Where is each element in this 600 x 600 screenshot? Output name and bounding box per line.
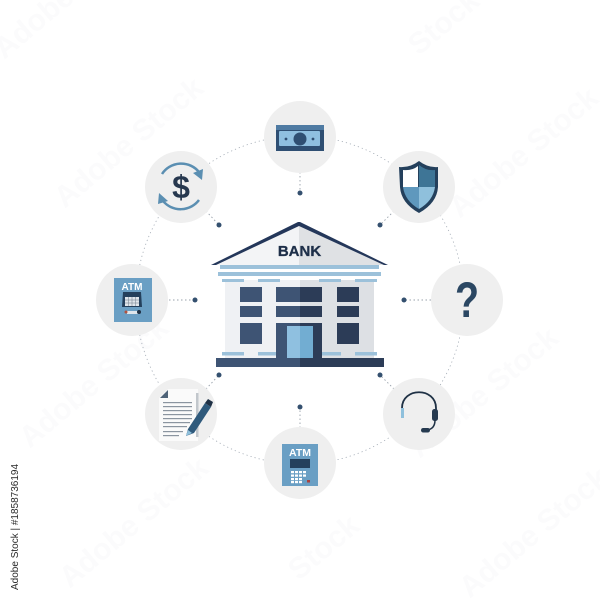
icon: headset — [383, 378, 455, 450]
icon: ATM machine with screen — [96, 264, 168, 336]
windows — [240, 287, 359, 344]
dotted ring connecting the service icons — [136, 136, 464, 464]
base — [216, 358, 384, 367]
icon: document and pen — [145, 378, 217, 450]
text: Adobe Stock — [443, 81, 600, 224]
icon: question mark — [431, 264, 503, 336]
text: Adobe Stock — [403, 321, 565, 464]
bank building — [211, 222, 388, 367]
text: Adobe Stock — [48, 71, 210, 214]
icon: ATM machine with screen: ATM — [122, 282, 142, 293]
building walls — [225, 280, 374, 359]
icon: shield — [383, 151, 455, 223]
text: Stock — [282, 509, 366, 587]
icon: ATM with keypad — [264, 427, 336, 499]
spokes and dots around the bank — [169, 172, 431, 428]
icon: currency exchange dollar — [145, 151, 217, 223]
text: Adobe Stock — [53, 451, 215, 594]
icon: question mark: ? — [455, 271, 479, 328]
text: Adobe Stock — [13, 311, 175, 454]
credit text: Adobe Stock | #1858736194 — [10, 464, 21, 590]
icon: banknote — [264, 101, 336, 173]
icon: currency exchange dollar: $ — [172, 169, 190, 205]
cornice bands — [218, 265, 381, 356]
pediment — [211, 222, 388, 265]
bank label: BANK — [278, 243, 321, 260]
door — [276, 323, 322, 359]
icon: ATM with keypad: ATM — [289, 447, 311, 459]
